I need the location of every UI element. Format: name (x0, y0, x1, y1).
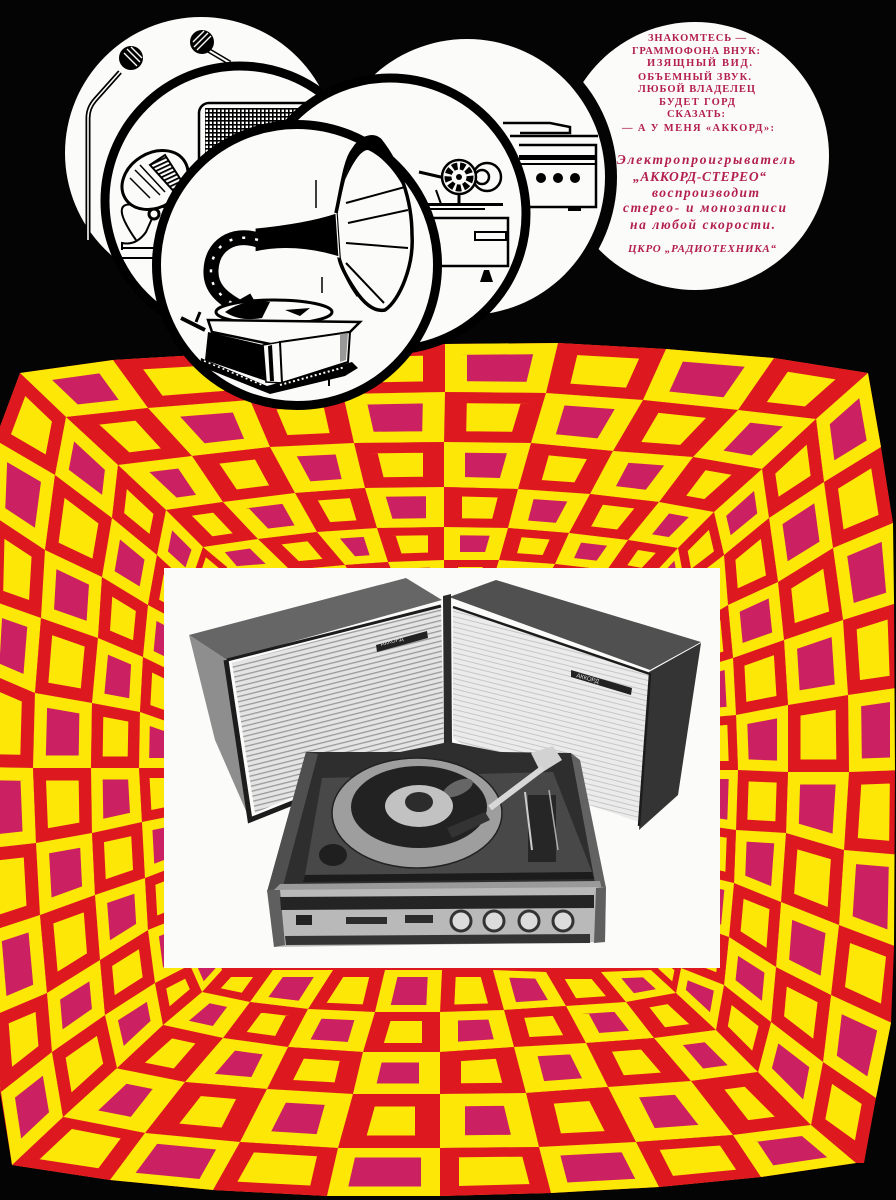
tone arm neck (211, 238, 258, 308)
slogan text: БУДЕТ ГОРД (659, 97, 736, 108)
right speaker badge: АККОРД (575, 673, 599, 685)
turntable (267, 742, 606, 947)
floor checker wall (12, 970, 856, 1196)
product description text (617, 152, 795, 232)
slogan text: ГРАММОФОНА ВНУК: (632, 46, 760, 57)
slogan text: ЗНАКОМТЕСЬ — (648, 33, 746, 44)
front panel (267, 887, 606, 947)
platter and record (332, 758, 502, 868)
right speaker (449, 580, 701, 830)
product description text: „АККОРД-СТЕРЕО“ (633, 169, 766, 184)
circle: microphones on stands (65, 17, 337, 289)
crank handle (181, 312, 205, 330)
maker credit: ЦКРО „РАДИОТЕХНИКА“ (627, 243, 776, 255)
slogan text (621, 33, 774, 134)
icon: tape recorder line art (419, 160, 508, 282)
left checker wall (0, 373, 227, 1165)
icon: loudspeaker grille (199, 103, 339, 193)
horn throat (255, 213, 339, 257)
icon: microphone right (190, 30, 230, 63)
slogan text: СКАЗАТЬ: (667, 109, 725, 120)
panel: product photo of Akkord-Stereo record player (164, 568, 720, 968)
speaker divider post (443, 594, 452, 745)
tunnel base (0, 343, 896, 1196)
circle: antique gramophone (156, 124, 438, 406)
icon: stereo unit line art (503, 123, 598, 211)
panel: op-art checkerboard tunnel (0, 343, 896, 1196)
product description text: воспроизводит (652, 185, 759, 200)
slogan text: ЛЮБОЙ ВЛАДЕЛЕЦ (638, 83, 755, 95)
tone arm (447, 746, 562, 838)
product description text: на любой скорости. (630, 217, 775, 232)
left speaker badge (376, 631, 428, 652)
left speaker (189, 578, 444, 820)
circle: loudspeaker and microphone (105, 66, 375, 336)
slider control (525, 790, 558, 862)
horn bell (336, 137, 412, 310)
slogan text: ОБЪЕМНЫЙ ЗВУК. (638, 71, 751, 83)
circle: turntable unit (317, 27, 617, 327)
platter (216, 300, 332, 324)
icon: microphone left (88, 46, 143, 240)
right speaker badge (571, 670, 632, 695)
icon: studio microphone (111, 139, 199, 258)
product description text: Электропроигрыватель (617, 152, 795, 167)
product description text: стерео- и монозаписи (623, 200, 786, 215)
cabinet (200, 320, 360, 394)
speed knob (319, 844, 347, 866)
support rods (316, 180, 322, 293)
slogan text: ИЗЯЩНЫЙ ВИД. (647, 57, 752, 69)
circle: tape recorder (254, 78, 526, 350)
right checker wall (650, 373, 896, 1163)
panel: text circle (561, 22, 829, 290)
icon: gramophone (181, 137, 412, 394)
left speaker badge: АККОРД (380, 636, 404, 648)
slogan text: — А У МЕНЯ «АККОРД»: (621, 123, 774, 134)
ceiling checker wall (20, 343, 868, 568)
